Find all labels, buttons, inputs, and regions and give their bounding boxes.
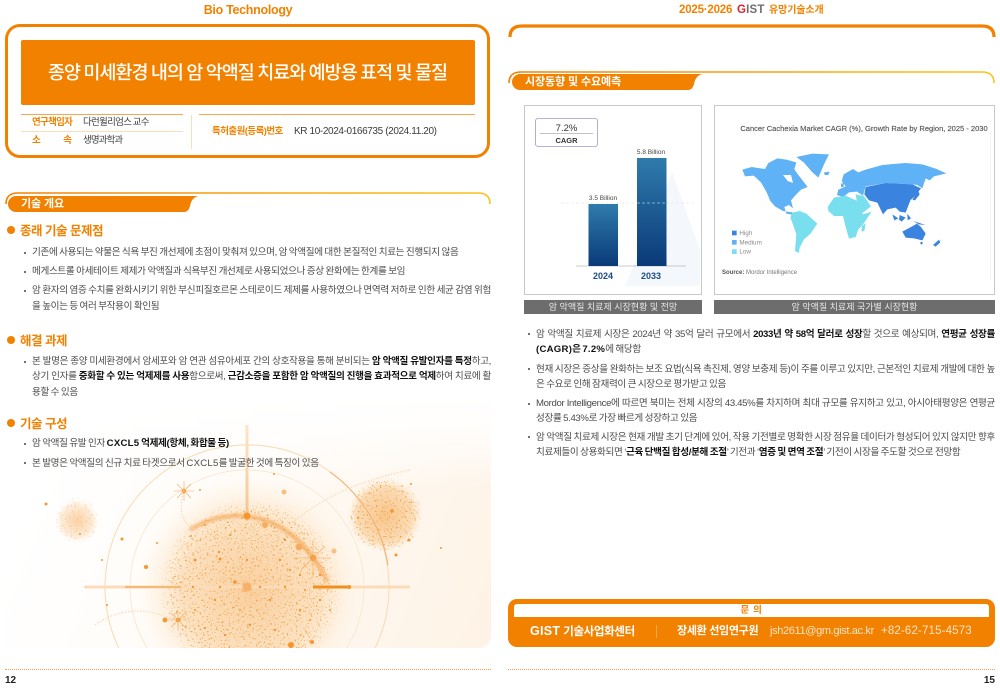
title banner (21, 40, 475, 105)
caption: market outlook (524, 300, 702, 314)
page number 12: 12 (5, 675, 16, 686)
section: 기술 구성 (7, 417, 319, 469)
bullet text 2: 메게스트롤 아세테이트 제제가 악액질과 식욕부진 개선제로 사용되었으나 증상 완화에는 한계를 보임 (32, 266, 405, 277)
affiliation value: 생명과학과 (83, 135, 122, 146)
page number 15: 15 (984, 675, 995, 686)
map legend: High (739, 230, 753, 237)
patent label: 특허출원(등록)번호 (212, 126, 283, 137)
footer right: dotted rule and page number (508, 669, 995, 687)
contact title bar (514, 604, 989, 617)
bullet text 2: 본 발명은 악액질의 신규 치료 타겟으로서 CXCL5를 발굴한 것에 특징이 있음 (32, 458, 319, 469)
GIST wordmark: GIST (737, 4, 765, 16)
map source: Source: Mordor Intelligence (722, 270, 798, 276)
body line 1: 본 발명은 종양 미세환경에서 암세포와 암 연관 섬유아세포 간의 상호작용을 통해 분비되는 암 악액질 유발인자를 특정하고, (32, 356, 491, 367)
paragraph 1 line 1: 암 악액질 치료제 시장은 2024년 약 35억 달러 규모에서 2033년 약 58억 달러로 성장할 것으로 예상되며, 연평균 성장률 (536, 329, 995, 340)
bullet text 1: 암 악액질 유발 인자 CXCL5 억제제(항체, 화합물 등) (32, 438, 229, 449)
bullet marker (7, 336, 15, 344)
researcher label: 연구책임자 (32, 117, 72, 128)
bullet text 3: 암 환자의 염증 수치를 완화시키기 위한 부신피질호르몬 스테로이드 제제를 사용하였으나 면역력 저하로 인한 세균 감염 위험 (32, 285, 491, 296)
contact email: jsh2611@gm.gist.ac.kr (770, 625, 874, 637)
researcher info table (21, 114, 475, 149)
paragraph 2 line 2: 은 수요로 인해 잠재력이 큰 시장으로 평가받고 있음 (536, 379, 726, 390)
caption: regional market: 암 악액질 치료제 국가별 시장현황 (792, 302, 917, 312)
CAGR badge (536, 118, 598, 146)
center logo and name: GIST 기술사업화센터 (530, 624, 635, 638)
contact phone: +82-62-715-4573 (881, 625, 972, 637)
contact title bar: 문 의 (741, 605, 762, 616)
section header text: 기술 개요 (21, 198, 64, 210)
paragraph 4 line 1: 암 악액질 치료제 시장은 현재 개발 초기 단계에 있어, 작용 기전별로 명확한 시장 점유율 데이터가 형성되어 있지 않지만 향후 (536, 432, 995, 443)
panel: regional market map (714, 105, 995, 295)
title card (5, 24, 490, 158)
decorative top frame, right page (508, 24, 996, 37)
section header: 기술 개요 (5, 192, 491, 212)
body line 2: 상기 인자를 중화할 수 있는 억제제를 사용함으로써, 근감소증을 포함한 암 악액질의 진행을 효과적으로 억제하여 치료에 활 (32, 371, 491, 382)
bar 2033 (637, 149, 666, 281)
heading: 해결 과제 (20, 334, 67, 348)
map legend: Low (739, 249, 751, 256)
market analysis text (528, 328, 995, 458)
paragraph 1 line 2: (CAGR)은 7.2%에 해당함 (536, 344, 641, 355)
section header text: 시장동향 및 수요예측 (525, 76, 621, 88)
paragraph 4 line 2: 치료제들이 상용화되면 ‘근육 단백질 합성/분해 조절’ 기전과 ‘염증 및 면역 조절’ 기전이 시장을 주도할 것으로 전망함 (536, 447, 960, 458)
caption: regional market (714, 300, 995, 314)
paragraph 3 line 1: Mordor Intelligence에 따르면 북미는 전체 시장의 43.45%를 차지하며 최대 규모를 유지하고 있고, 아시아태평양은 연평균 (536, 398, 995, 409)
bullet text 3 continued: 을 높이는 등 여러 부작용이 확인됨 (32, 301, 159, 312)
axis and reference line (561, 203, 695, 266)
affiliation label: 소 속 (32, 135, 72, 146)
patent number: KR 10-2024-0166735 (2024.11.20) (294, 126, 437, 137)
body line 3: 용할 수 있음 (32, 387, 78, 398)
caption: market outlook: 암 악액질 치료제 시장현황 및 전망 (549, 302, 677, 312)
section: 종래 기술 문제점 (7, 224, 491, 312)
panel: market outlook bar chart (524, 105, 702, 295)
heading: 종래 기술 문제점 (20, 224, 103, 238)
page header: 2025·2026 GIST 유망기술소개 (679, 4, 824, 16)
bar 2024: 2024 (593, 271, 613, 281)
contact person: 장세환 선임연구원 (677, 625, 758, 637)
bullet marker (7, 226, 15, 234)
heading: 기술 구성 (20, 417, 67, 431)
nebula background illustration (44, 425, 491, 648)
header Korean text: 유망기술소개 (769, 5, 824, 16)
researcher name: 다런윌리엄스 교수 (83, 117, 149, 128)
bar 2033: 5.8 Billion (637, 149, 665, 156)
map legend (732, 230, 762, 256)
map legend: Medium (739, 239, 762, 246)
bar 2024 (588, 195, 618, 281)
section: 해결 과제 (7, 334, 491, 398)
bar 2024: 3.5 Billion (589, 195, 617, 202)
CAGR badge: CAGR (555, 136, 578, 145)
page header: 2025·2026 GIST 유망기술소개: 2025·2026 (679, 4, 732, 16)
contact box (508, 599, 995, 647)
bullet marker (7, 419, 15, 427)
title text: 종양 미세환경 내의 암 악액질 치료와 예방용 표적 및 물질 (48, 62, 447, 83)
paragraph 2 line 1: 현재 시장은 증상을 완화하는 보조 요법(식욕 촉진제, 영양 보충제 등)이 주를 이루고 있지만, 근본적인 치료제 개발에 대한 높 (536, 364, 995, 375)
bullet text 1: 기존에 사용되는 약물은 식욕 부진 개선제에 초점이 맞춰져 있으며, 암 악액질에 대한 본질적인 치료는 진행되지 않음 (32, 247, 458, 258)
CAGR badge: 7.2% (556, 123, 578, 134)
world map (742, 154, 946, 253)
footer left: dotted rule and page number (5, 669, 491, 687)
bar 2033: 2033 (641, 271, 661, 281)
paragraph 3 line 2: 성장률 5.43%로 가장 빠르게 성장하고 있음 (536, 413, 697, 424)
page header: Bio Technology: Bio Technology (204, 3, 292, 17)
map title: Cancer Cachexia Market CAGR (%), Growth Rate by Region, 2025 - 2030 (740, 125, 988, 133)
section header: 시장동향 및 수요예측 (508, 71, 995, 90)
